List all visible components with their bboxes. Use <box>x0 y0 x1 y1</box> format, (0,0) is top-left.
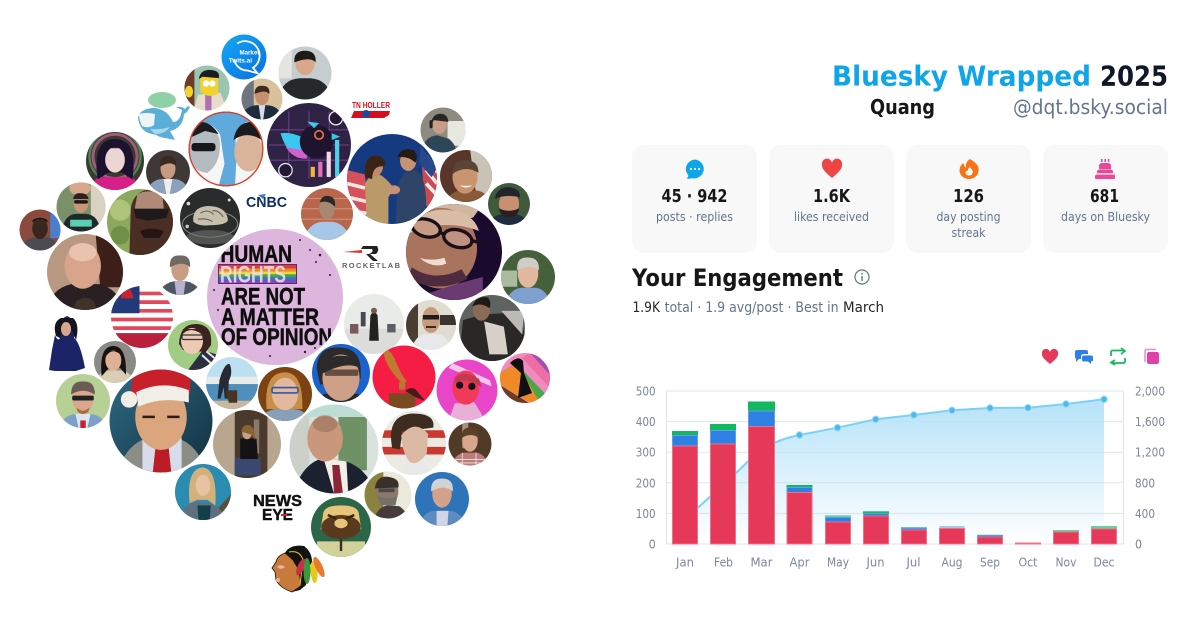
month labels: Sep <box>980 554 1000 570</box>
label: streak <box>952 226 986 240</box>
left axis labels: 100 <box>636 506 656 521</box>
avatar: glasses man with red tie <box>56 374 110 428</box>
legend icons <box>1042 348 1159 365</box>
logo: Rocket Lab: ROCKETLAB <box>342 261 401 270</box>
stat card: likes received <box>769 145 894 253</box>
avatar: brain and stars <box>180 188 240 248</box>
display name: Quang <box>870 95 935 119</box>
icon: replies bubbles <box>1075 350 1093 364</box>
avatar: rainbow stripes silhouette <box>500 353 550 403</box>
left axis labels <box>636 384 656 552</box>
avatar: white room scene <box>344 294 404 354</box>
month labels: Feb <box>714 554 733 570</box>
icon: likes heart <box>1042 349 1058 364</box>
left axis labels: 200 <box>636 475 656 490</box>
avatar: man with stubble <box>146 150 190 194</box>
right axis labels <box>1135 384 1165 552</box>
logo: News Eye <box>253 493 302 524</box>
poster: Human Rights Are Not A Matter Of Opinion: A MATTER <box>221 304 319 331</box>
avatar: man with brick wall <box>301 188 353 240</box>
avatar: person on beach <box>206 357 258 409</box>
value: 681 <box>1090 186 1119 207</box>
avatar: man on blue backdrop <box>415 472 469 526</box>
avatar: blonde woman <box>175 464 231 520</box>
month labels: Apr <box>790 554 810 570</box>
icon: cake <box>1095 159 1115 179</box>
poster: Human Rights Are Not A Matter Of Opinion <box>207 229 343 365</box>
logo: News Eye: NEWS <box>253 493 302 510</box>
avatar: man in plaid shirt <box>448 422 492 466</box>
month labels: Mar <box>750 554 773 570</box>
avatar: MarketTwits logo: Market <box>240 49 260 56</box>
avatar: older man smiling <box>501 250 555 304</box>
cumulative points <box>796 396 1107 438</box>
avatar: red background trophy <box>372 346 436 408</box>
avatar: man in dark shirt <box>278 46 332 100</box>
logo: CNBC: CNBC <box>246 194 287 211</box>
right axis labels: 800 <box>1135 475 1155 490</box>
engagement summary: total · 1.9 avg/post · Best in <box>665 300 839 316</box>
label <box>936 210 1000 240</box>
avatar: man in blue background <box>312 344 370 402</box>
avatar: smiling woman <box>94 341 136 383</box>
avatar: smiling man <box>440 150 492 202</box>
cumulative area <box>685 399 1104 544</box>
month labels <box>675 554 1115 570</box>
engagement summary: March <box>843 300 884 316</box>
avatar: man with child on shoulders <box>56 182 106 232</box>
avatar: woman in blue jacket <box>49 316 85 371</box>
month labels: Jun <box>866 554 884 570</box>
avatar: two men with sunglasses <box>188 112 264 186</box>
month labels: Dec <box>1094 554 1115 570</box>
poster: Human Rights Are Not A Matter Of Opinion: HUMAN <box>220 241 292 268</box>
heading: your engagement: Your Engagement <box>631 264 843 292</box>
logo: Chicago Blackhawks <box>272 546 327 592</box>
avatar: man with moustache and glasses <box>406 300 456 350</box>
avatar: woman and man shaking hands <box>347 134 437 224</box>
poster: Human Rights Are Not A Matter Of Opinion: ARE NOT <box>221 284 305 310</box>
avatar: man in santa hat <box>110 367 212 472</box>
left axis labels: 400 <box>636 414 656 429</box>
avatar: MarketTwits logo: Twits.ai <box>229 57 252 64</box>
avatar: man in hood <box>20 210 60 250</box>
month labels: Oct <box>1018 554 1038 570</box>
avatar: man in suit <box>242 78 282 120</box>
avatar: man with cap <box>488 183 530 225</box>
left axis labels: 500 <box>636 384 656 398</box>
month labels: May <box>827 554 850 570</box>
label: days on Bluesky <box>1061 210 1150 224</box>
avatar: man with headset <box>420 108 466 152</box>
logo: News Eye: EYE <box>262 507 293 524</box>
avatar: cartoon bearded man <box>311 497 371 557</box>
icon: flame <box>959 159 979 179</box>
icon: reposts arrows <box>1111 348 1125 365</box>
stat card: day posting streak <box>906 145 1031 253</box>
title: Bluesky Wrapped <box>832 60 1091 92</box>
right axis labels: 1,600 <box>1135 414 1165 429</box>
cumulative line <box>685 399 1104 519</box>
label: likes received <box>794 210 869 224</box>
avatar: bearded man with sunglasses <box>364 472 412 518</box>
engagement summary: 1.9K <box>632 300 661 316</box>
avatar: man with long hair and blue glasses <box>258 367 312 421</box>
icon: chat bubble <box>686 160 704 179</box>
left axis labels: 300 <box>636 445 656 460</box>
poster: Human Rights Are Not A Matter Of Opinion: OF OPINION <box>221 324 332 351</box>
avatar: young man with flag <box>382 411 446 475</box>
handle: @dqt.bsky.social <box>1013 95 1168 119</box>
right axis labels: 1,200 <box>1135 445 1165 460</box>
icon: green and blue whale <box>138 92 190 140</box>
avatar: man with sunglasses and foliage <box>107 189 173 255</box>
logo: Rocket Lab <box>342 246 401 270</box>
value: 126 <box>953 186 984 207</box>
right axis labels: 2,000 <box>1135 384 1165 398</box>
logo: TN Holler <box>351 101 390 118</box>
avatar: twitter bird chart <box>267 103 351 187</box>
avatar: man in dark coat <box>459 295 525 361</box>
avatar: man in suit with striped tie <box>290 404 378 495</box>
avatar: man with glasses, purple tones <box>404 204 502 300</box>
month labels: Nov <box>1056 554 1077 570</box>
icon: quotes copy <box>1145 350 1159 364</box>
icon: info <box>855 270 869 284</box>
icon: heart <box>822 159 842 178</box>
label: day posting <box>936 210 1000 224</box>
avatar: MarketTwits logo <box>222 34 266 80</box>
month labels: Jul <box>906 554 920 570</box>
avatar: woman in stone doorway <box>213 410 281 478</box>
avatar: woman with glasses and stripes <box>168 320 218 370</box>
value: 1.6K <box>813 186 851 207</box>
avatar cluster <box>20 34 555 592</box>
poster: Human Rights Are Not A Matter Of Opinion: RIGHTS <box>220 262 286 288</box>
chart: monthly engagement <box>636 384 1165 570</box>
logo: TN Holler: TN HOLLER <box>352 101 390 110</box>
avatar: cartoon character <box>184 66 230 110</box>
blue reply bars <box>672 411 1003 537</box>
right axis labels: 0 <box>1135 536 1142 552</box>
month labels: Jan <box>675 554 694 570</box>
label: posts · replies <box>656 210 733 224</box>
right axis labels: 400 <box>1135 506 1155 521</box>
avatar: girl illustration <box>86 131 144 190</box>
stat card: posts and replies <box>632 145 757 253</box>
avatar: American flag with santa hat <box>111 286 173 348</box>
stat card: days on Bluesky <box>1043 145 1168 253</box>
month labels: Aug <box>942 554 962 570</box>
left axis labels: 0 <box>649 536 656 552</box>
avatar: pink man with heart glasses <box>436 360 498 420</box>
value: 45 · 942 <box>662 186 728 207</box>
title: 2025 <box>1100 60 1168 92</box>
avatar: man with grey hair <box>162 255 198 295</box>
green repost bars <box>672 402 1117 533</box>
avatar: bald man <box>47 234 123 316</box>
red like bars <box>672 426 1116 544</box>
grid lines <box>666 391 1124 544</box>
